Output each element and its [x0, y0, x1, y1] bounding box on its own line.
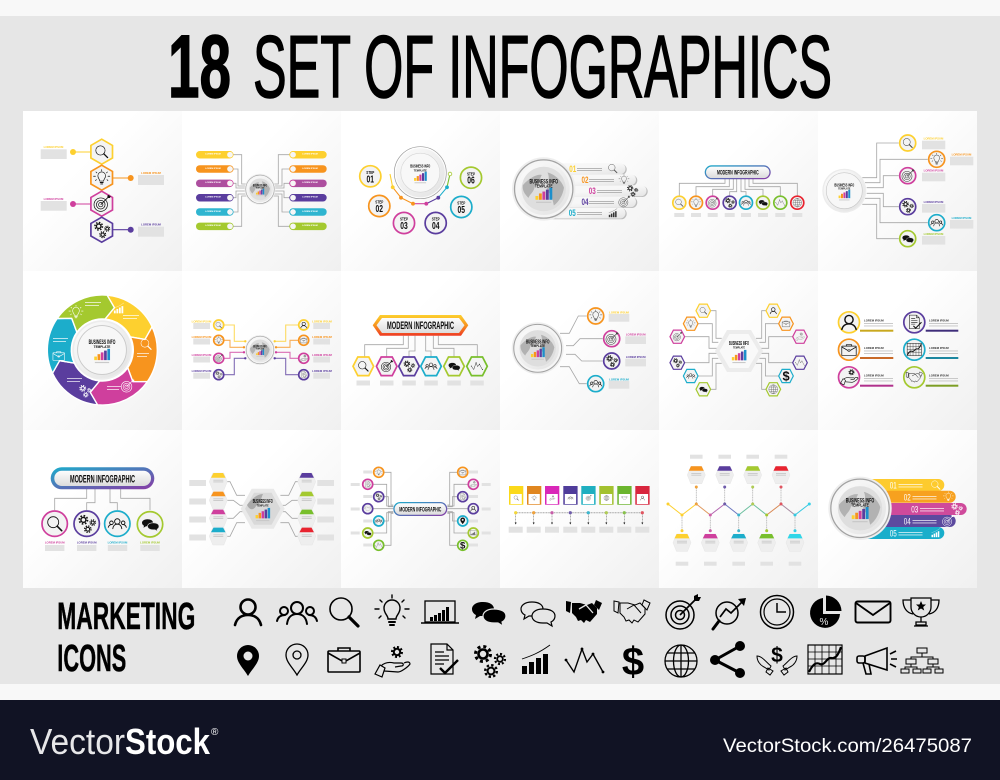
- text blocks: [41, 145, 164, 237]
- tab numbers: 05: [569, 208, 576, 218]
- captions: [192, 320, 333, 379]
- panel: globe with coloured bars: [818, 430, 977, 588]
- center badge: [822, 169, 866, 213]
- center badge: [394, 147, 446, 199]
- title pill: MODERN INFOGRAPHIC: [717, 170, 759, 177]
- step 04: STEP: [432, 217, 440, 222]
- left column: LOREM IPSUM: [864, 374, 884, 378]
- icon: laptop chart: [421, 601, 459, 623]
- panel: pill with fourteen circles: [341, 430, 500, 588]
- segment icons: [53, 303, 151, 397]
- central hexagon: BUSINESS INFO: [729, 341, 749, 347]
- captions: LOREM IPSUM: [312, 320, 333, 324]
- hexagon: target: [91, 191, 112, 216]
- tab numbers: 01: [569, 164, 576, 174]
- title pill: [393, 502, 447, 516]
- icon: share: [710, 641, 745, 678]
- panel: modern infographic hexagons: [341, 271, 500, 430]
- icon: megaphone: [857, 648, 897, 674]
- right pills: LOREM IPSUM: [302, 168, 318, 170]
- bar numbers: 03: [911, 504, 918, 516]
- captions: [356, 380, 484, 386]
- step 03: 03: [400, 221, 408, 232]
- captions: [189, 480, 334, 540]
- captions: LOREM IPSUM: [312, 353, 333, 357]
- icon: globe: [665, 645, 697, 677]
- captions: LOREM IPSUM: [924, 232, 944, 236]
- captions: LOREM IPSUM: [952, 152, 972, 156]
- icon: person: [235, 600, 261, 625]
- icon: org chart: [901, 648, 943, 673]
- captions: LOREM IPSUM: [609, 310, 630, 314]
- center badge: TEMPLATE: [414, 169, 427, 173]
- right pills: [289, 151, 327, 230]
- icon: handshake filled: [566, 600, 602, 623]
- captions: LOREM IPSUM: [626, 355, 646, 359]
- bar text: [898, 484, 944, 535]
- title pill: MODERN INFOGRAPHIC: [399, 506, 442, 513]
- captions: LOREM IPSUM: [45, 540, 65, 544]
- heading: marketing icons: MARKETING: [57, 595, 195, 638]
- captions: LOREM IPSUM: [626, 332, 646, 336]
- captions: LOREM IPSUM: [924, 200, 944, 204]
- icon: document check: [431, 644, 458, 674]
- step 06: STEP: [467, 171, 475, 176]
- captions: [676, 455, 801, 566]
- icon: gears: [476, 646, 505, 677]
- segment text: [53, 302, 149, 390]
- right column: LOREM IPSUM: [929, 374, 949, 378]
- captions: LOREM IPSUM: [108, 540, 128, 544]
- icon: group: [277, 602, 317, 624]
- step 06: [460, 167, 482, 188]
- icon: clock: [760, 596, 794, 628]
- left circles: [363, 467, 384, 550]
- heading: marketing icons: ICONS: [57, 637, 126, 680]
- icon: envelope: [856, 602, 890, 622]
- icon: light bulb: [375, 595, 409, 625]
- left pills: LOREM IPSUM: [205, 182, 221, 184]
- right column: LOREM IPSUM: [929, 346, 949, 350]
- step 04: 04: [432, 221, 440, 232]
- left pills: LOREM IPSUM: [205, 168, 221, 170]
- step 02: 02: [376, 204, 383, 215]
- step 05: STEP: [457, 201, 465, 206]
- bottom cards: [673, 534, 804, 551]
- panel: twelve pill mind map: [182, 111, 341, 271]
- title pill: [705, 165, 771, 179]
- right hexagons: [766, 304, 807, 396]
- right column: [904, 312, 958, 388]
- center badge: [244, 174, 276, 205]
- footer logo: ®: [211, 727, 219, 738]
- central hexagon: BUSINESS INFO: [253, 499, 273, 505]
- bar numbers: 02: [904, 492, 911, 503]
- icon: handshake outline: [614, 600, 650, 623]
- panel: central hexagon with cards: [182, 430, 341, 588]
- right pills: LOREM IPSUM: [302, 211, 318, 213]
- cycle segments: [47, 295, 157, 405]
- right pills: LOREM IPSUM: [302, 225, 318, 227]
- step 01: [360, 166, 381, 187]
- icon: chat bubbles filled: [472, 602, 506, 626]
- title hexagon: [373, 315, 468, 336]
- panel: eight circles mind map: [182, 271, 341, 430]
- panel: modern infographic eight circles: [659, 111, 818, 271]
- panel: six steps arc: [341, 111, 500, 271]
- bar numbers: 05: [890, 528, 897, 540]
- footer logo: [30, 721, 219, 762]
- icon row one: [235, 594, 939, 629]
- icon: map pin outline: [286, 644, 308, 675]
- text blocks: LOREM IPSUM: [141, 222, 162, 226]
- captions: [922, 136, 973, 245]
- left cards: [209, 473, 227, 545]
- step 05: [451, 196, 472, 218]
- center badge: [71, 319, 133, 381]
- icon: briefcase: [328, 648, 360, 672]
- step 01: 01: [367, 174, 374, 185]
- icon: target: [666, 594, 701, 629]
- heading: marketing icons: [57, 595, 195, 680]
- footer image id: VectorStock.com/26475087: [723, 735, 972, 757]
- left hexagons: [670, 304, 711, 396]
- icon: rising bars: [522, 645, 550, 674]
- central hexagon: TEMPLATE: [257, 504, 269, 508]
- bar numbers: [890, 480, 918, 540]
- hexagon: search: [91, 139, 112, 164]
- tab numbers: 03: [589, 186, 596, 196]
- panel: globe with grey tabs: [500, 111, 659, 271]
- title hexagon: MODERN INFOGRAPHIC: [387, 320, 454, 332]
- text blocks: LOREM IPSUM: [44, 197, 64, 201]
- branch circles: [900, 135, 945, 247]
- coloured bars: [850, 479, 967, 539]
- branch circles: [588, 308, 620, 392]
- captions: [509, 527, 649, 533]
- center badge: [245, 335, 275, 365]
- tab icons: [608, 164, 638, 217]
- globe badge: [512, 157, 575, 221]
- icon: map pin filled: [237, 645, 259, 676]
- step 02: STEP: [375, 200, 383, 205]
- panel: modern infographic four circles: [23, 430, 182, 588]
- right pills: LOREM IPSUM: [302, 196, 318, 198]
- white strip above footer: [0, 684, 1000, 700]
- left pills: LOREM IPSUM: [205, 225, 221, 227]
- tab numbers: [569, 164, 596, 218]
- title pill: MODERN INFOGRAPHIC: [70, 473, 135, 485]
- hexagon: gears: [91, 217, 112, 242]
- captions: LOREM IPSUM: [312, 335, 333, 339]
- captions: [674, 213, 802, 217]
- arc of dots: [390, 172, 452, 206]
- colored cards: [509, 486, 650, 505]
- step 03: [393, 212, 415, 234]
- icon: growth magnifier: [713, 598, 746, 629]
- panel: zigzag timeline: [659, 430, 818, 588]
- step 02: [369, 195, 390, 217]
- timeline dots and arrows: [514, 511, 644, 524]
- dotted stems and nodes: [666, 486, 811, 532]
- globe badge: [512, 322, 564, 374]
- icon: dollar: [622, 640, 644, 684]
- text blocks: LOREM IPSUM: [44, 145, 64, 149]
- bar numbers: 04: [904, 516, 911, 528]
- top cards: [687, 466, 790, 484]
- title: 18: [168, 16, 231, 116]
- hexagon: idea: [91, 165, 112, 190]
- title: [168, 16, 832, 116]
- tab numbers: 04: [582, 197, 588, 207]
- captions: LOREM IPSUM: [192, 369, 212, 373]
- tab text: [577, 168, 622, 215]
- icon circles: [214, 320, 309, 380]
- step 01: STEP: [366, 170, 374, 175]
- panel: hexagon list: [23, 111, 182, 271]
- captions: LOREM IPSUM: [192, 335, 212, 339]
- icon: chart grid: [808, 645, 842, 674]
- captions: LOREM IPSUM: [952, 216, 972, 220]
- captions: LOREM IPSUM: [192, 353, 212, 357]
- footer bar: [0, 700, 1000, 780]
- right circles: [458, 467, 478, 552]
- right cards: [298, 473, 316, 545]
- captions: [609, 310, 646, 389]
- left column: LOREM IPSUM: [864, 318, 884, 322]
- connectors: [224, 325, 298, 375]
- panel: badge with six branches: [818, 111, 977, 271]
- title pill: [51, 467, 154, 489]
- icon hexagons: [353, 357, 487, 376]
- icon: zigzag line: [565, 648, 604, 673]
- icon: hand with gear: [375, 647, 410, 677]
- icon: search: [330, 598, 358, 626]
- circles with icons: [673, 196, 804, 209]
- icon: trophy: [903, 598, 939, 626]
- captions: LOREM IPSUM: [140, 540, 161, 544]
- tab numbers: 02: [582, 175, 588, 185]
- icon circles: [42, 511, 163, 537]
- zigzag line: [668, 504, 809, 515]
- left pills: LOREM IPSUM: [205, 154, 221, 156]
- icon: chat bubbles outline: [521, 602, 555, 626]
- left column: [838, 312, 893, 388]
- step 04: [425, 212, 446, 234]
- left pills: [196, 151, 233, 230]
- captions: LOREM IPSUM: [924, 168, 944, 172]
- left pills: LOREM IPSUM: [205, 211, 221, 213]
- captions: LOREM IPSUM: [609, 378, 630, 382]
- bar numbers: 01: [890, 480, 897, 492]
- top strip background: [0, 0, 1000, 16]
- text blocks: LOREM IPSUM: [141, 171, 162, 175]
- step 05: 05: [458, 205, 465, 216]
- left pills: LOREM IPSUM: [205, 196, 221, 198]
- icon: pie chart: [810, 596, 842, 628]
- right pills: LOREM IPSUM: [302, 182, 318, 184]
- icon: hands with dollar: [757, 644, 797, 675]
- dotted timeline: [516, 512, 642, 514]
- footer logo: Vector: [30, 721, 125, 762]
- footer logo: Stock: [125, 721, 211, 762]
- captions: LOREM IPSUM: [312, 369, 333, 373]
- bar icons: [932, 481, 962, 537]
- tabs: [542, 163, 648, 219]
- central hexagon: [241, 489, 285, 529]
- right column: LOREM IPSUM: [929, 318, 949, 322]
- panel: timeline with eight cards: [500, 430, 659, 588]
- icon row two: [237, 640, 943, 684]
- right pills: LOREM IPSUM: [302, 154, 318, 156]
- captions: LOREM IPSUM: [192, 320, 212, 324]
- central hexagon: TEMPLATE: [733, 346, 745, 350]
- captions: [45, 540, 161, 551]
- captions: [351, 470, 491, 546]
- panel: globe with four branches: [500, 271, 659, 430]
- step 03: STEP: [400, 217, 408, 222]
- globe badge: [828, 477, 892, 540]
- center badge: BUSINESS INFO: [410, 164, 431, 169]
- central hexagon: [715, 330, 763, 372]
- step 06: 06: [467, 176, 475, 187]
- connector dots: [243, 340, 277, 359]
- left column: LOREM IPSUM: [864, 346, 884, 350]
- panel: central hexagon with twelve hexagons: [659, 271, 818, 430]
- captions: LOREM IPSUM: [924, 136, 944, 140]
- panel: circular arrow cycle: [23, 271, 182, 430]
- captions: LOREM IPSUM: [77, 540, 97, 544]
- panel: six circles with bars: [818, 271, 977, 430]
